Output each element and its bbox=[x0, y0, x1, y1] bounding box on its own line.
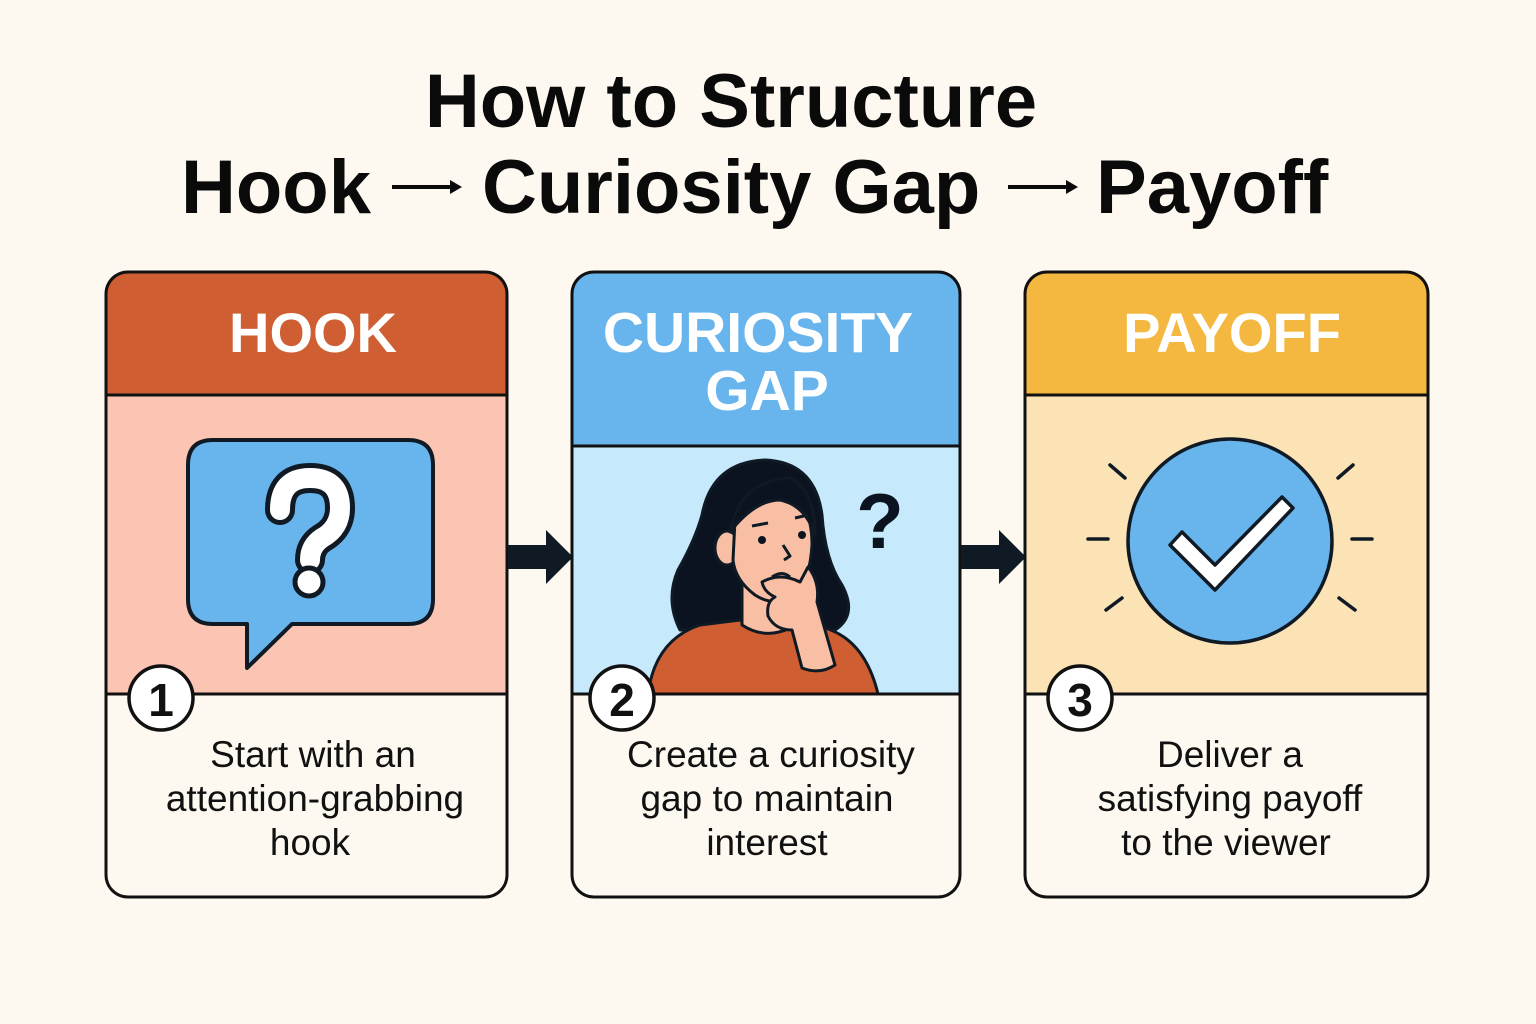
heading: curiosity gap: CURIOSITY bbox=[603, 301, 913, 365]
title: Payoff bbox=[1096, 145, 1329, 230]
heading: payoff: PAYOFF bbox=[1123, 301, 1341, 364]
number badge 2 bbox=[590, 666, 654, 730]
number badge 3: 3 bbox=[1067, 674, 1093, 726]
number badge 1: 1 bbox=[148, 674, 174, 726]
number badge 1 bbox=[129, 666, 193, 730]
icon: speech bubble question bbox=[188, 440, 433, 668]
text: payoff description bbox=[1098, 734, 1363, 863]
number badge 2: 2 bbox=[609, 674, 635, 726]
text: curiosity description: interest bbox=[706, 822, 828, 863]
title: Curiosity Gap bbox=[482, 145, 980, 230]
heading: hook: HOOK bbox=[229, 301, 397, 364]
arrow 2 bbox=[961, 530, 1026, 584]
arrow 1 bbox=[508, 530, 573, 584]
text: hook description bbox=[166, 734, 464, 863]
text: curiosity description bbox=[627, 734, 915, 863]
title bbox=[181, 59, 1329, 230]
panel: hook bbox=[106, 272, 507, 897]
text: hook description: Start with an bbox=[210, 734, 416, 775]
icon: thinking woman bbox=[648, 460, 878, 694]
text: payoff description: to the viewer bbox=[1121, 822, 1331, 863]
icon: check circle bbox=[1088, 439, 1372, 643]
icon: question mark: ? bbox=[856, 477, 904, 565]
heading: curiosity gap: GAP bbox=[705, 359, 829, 423]
text: curiosity description: gap to maintain bbox=[640, 778, 894, 819]
title: How to Structure bbox=[425, 59, 1037, 144]
panel: payoff bbox=[1025, 272, 1428, 897]
title: Hook bbox=[181, 145, 372, 230]
text: hook description: hook bbox=[270, 822, 351, 863]
number badge 3 bbox=[1048, 666, 1112, 730]
text: hook description: attention-grabbing bbox=[166, 778, 464, 819]
heading: curiosity gap bbox=[603, 301, 913, 423]
text: curiosity description: Create a curiosity bbox=[627, 734, 915, 775]
panel: curiosity gap bbox=[572, 272, 960, 897]
text: payoff description: satisfying payoff bbox=[1098, 778, 1363, 819]
text: payoff description: Deliver a bbox=[1157, 734, 1303, 775]
